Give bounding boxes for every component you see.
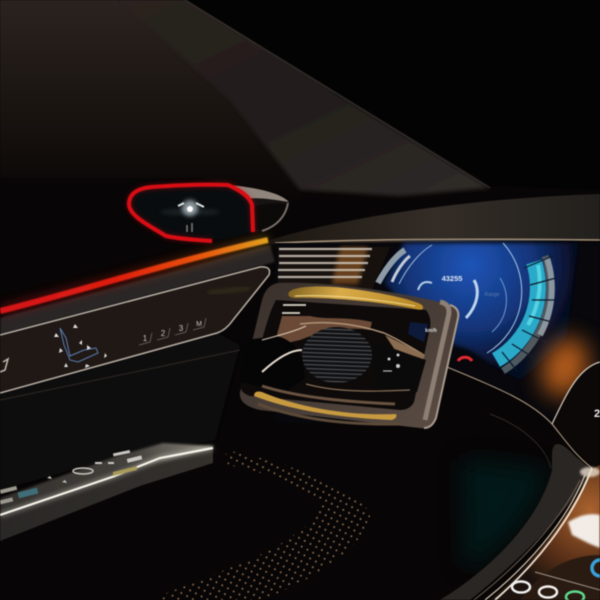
ambient light strip — [0, 240, 268, 311]
memory buttons: 2 — [161, 329, 166, 338]
center console — [0, 443, 370, 600]
console side face — [0, 448, 213, 541]
side mirror — [129, 185, 289, 241]
mirror housing — [228, 185, 289, 232]
upper door frame and A-pillar — [0, 0, 490, 200]
steering wheel — [240, 283, 458, 428]
bottom amber light — [254, 392, 396, 420]
air vent — [278, 247, 390, 290]
window switch glyph — [0, 359, 8, 372]
right display outline — [552, 362, 600, 470]
console switches — [0, 450, 142, 504]
white reflection — [568, 514, 600, 548]
blue gauge background — [384, 243, 578, 380]
bright light line — [0, 448, 213, 515]
right spoke buttons — [372, 342, 426, 392]
lower spoke highlight — [306, 384, 410, 391]
memory buttons: 3 — [179, 324, 184, 333]
wheel interior — [240, 300, 430, 410]
console top surface — [0, 443, 213, 515]
door lower trim — [0, 333, 240, 490]
teal glow — [462, 460, 548, 570]
digital instrument display: 2 — [594, 408, 600, 420]
memory buttons — [139, 318, 206, 345]
door control panel — [0, 267, 270, 400]
gauge arcs — [378, 243, 522, 353]
orange glow — [534, 331, 596, 403]
gold slider — [113, 466, 137, 476]
lower right center screen — [474, 465, 600, 600]
screen icons — [512, 560, 600, 600]
left spoke — [240, 336, 305, 392]
memory buttons: 1 — [143, 334, 148, 343]
windshield top right — [187, 0, 600, 190]
dashboard top — [270, 194, 600, 244]
mirror glass — [129, 185, 253, 240]
teal speed segments — [496, 256, 556, 372]
red mirror outline — [129, 185, 253, 241]
wheel frame — [240, 283, 458, 428]
seat adjust icon — [54, 324, 107, 368]
digital instrument display: Range — [485, 292, 500, 298]
phone icon — [458, 357, 472, 361]
door upper trim — [0, 245, 275, 335]
dotted perforated trim — [150, 450, 370, 600]
reflections inside wheel — [274, 316, 372, 346]
dark trim band — [440, 444, 592, 600]
mirror reflection — [160, 200, 220, 232]
center hub grille — [302, 327, 372, 383]
gauge readout: 43255 — [442, 274, 462, 283]
digital instrument display — [275, 243, 600, 470]
top amber light — [288, 286, 423, 310]
dash lower curve and glove area — [400, 367, 600, 600]
steering wheel: km/h — [425, 328, 437, 334]
memory buttons: M — [196, 321, 202, 328]
